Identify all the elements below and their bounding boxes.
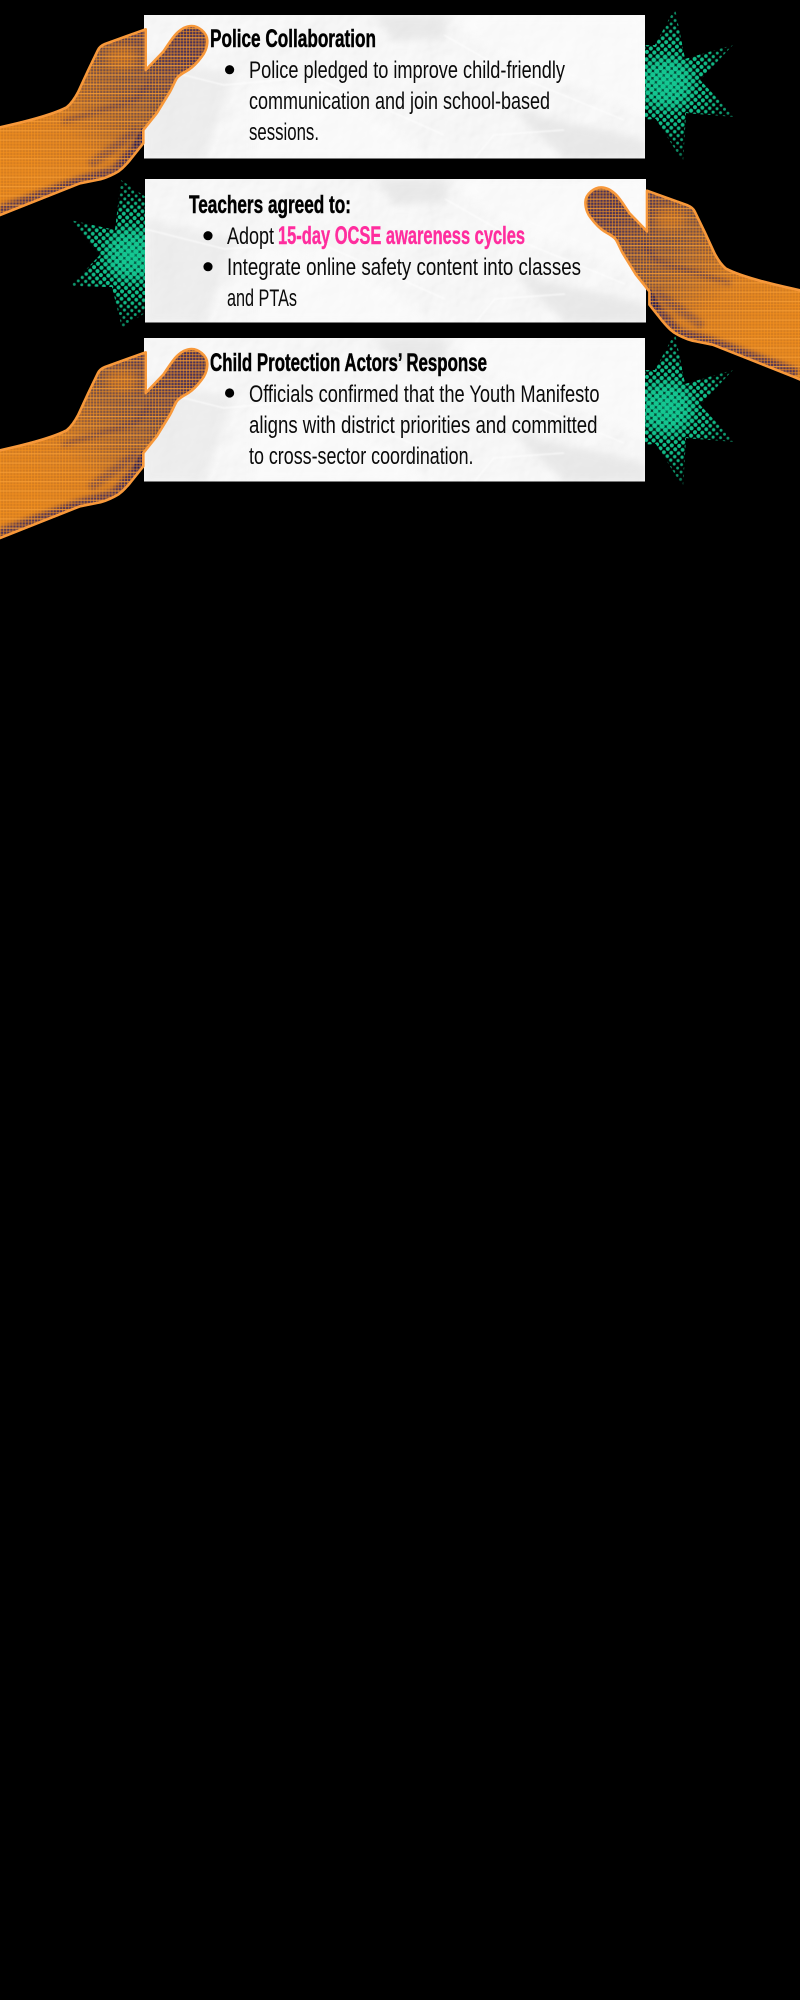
- bullet text: online safety content: Integrate online safety content into classes: [227, 254, 581, 281]
- icon: green halftone star, lower right: [607, 318, 747, 498]
- bullet text: police pledge: communication and join school-based: [249, 88, 550, 115]
- panel: child protection actors: [144, 338, 645, 482]
- bullet text: officials confirmed: aligns with district priorities and committed: [249, 412, 598, 439]
- panel: teachers agreed: [145, 179, 646, 323]
- bullet text: online safety content: and PTAs: [227, 285, 297, 312]
- panel: police collaboration: [144, 15, 645, 159]
- icon: green halftone star, middle left: [52, 165, 192, 345]
- icon: halftone hand, middle right: [580, 181, 800, 386]
- heading: police collaboration: Police Collaboration: [210, 25, 376, 53]
- bullet text: online safety content: [203, 254, 581, 312]
- bullet text: officials confirmed: to cross-sector coordination.: [249, 443, 474, 470]
- bullet text: police pledge: Police pledged to improve child-friendly: [249, 57, 565, 84]
- bullet text: officials confirmed: Officials confirmed that the Youth Manifesto: [249, 381, 600, 408]
- icon: halftone hand, lower left: [0, 343, 213, 548]
- bullet text: awareness cycles: 15-day OCSE awareness cycles: [278, 222, 525, 250]
- icon: green halftone star, top right: [607, 0, 747, 173]
- bullet text: awareness cycles: Adopt: [227, 223, 274, 250]
- icon: halftone hand, top left: [0, 20, 213, 225]
- bullet text: officials confirmed: [225, 381, 600, 470]
- bullet text: awareness cycles: [203, 222, 525, 250]
- heading: child protection actors response: Child Protection Actors’ Response: [210, 349, 487, 377]
- heading: teachers agreed to: Teachers agreed to:: [189, 191, 351, 219]
- bullet text: police pledge: sessions.: [249, 119, 319, 146]
- bullet text: police pledge: [225, 57, 565, 146]
